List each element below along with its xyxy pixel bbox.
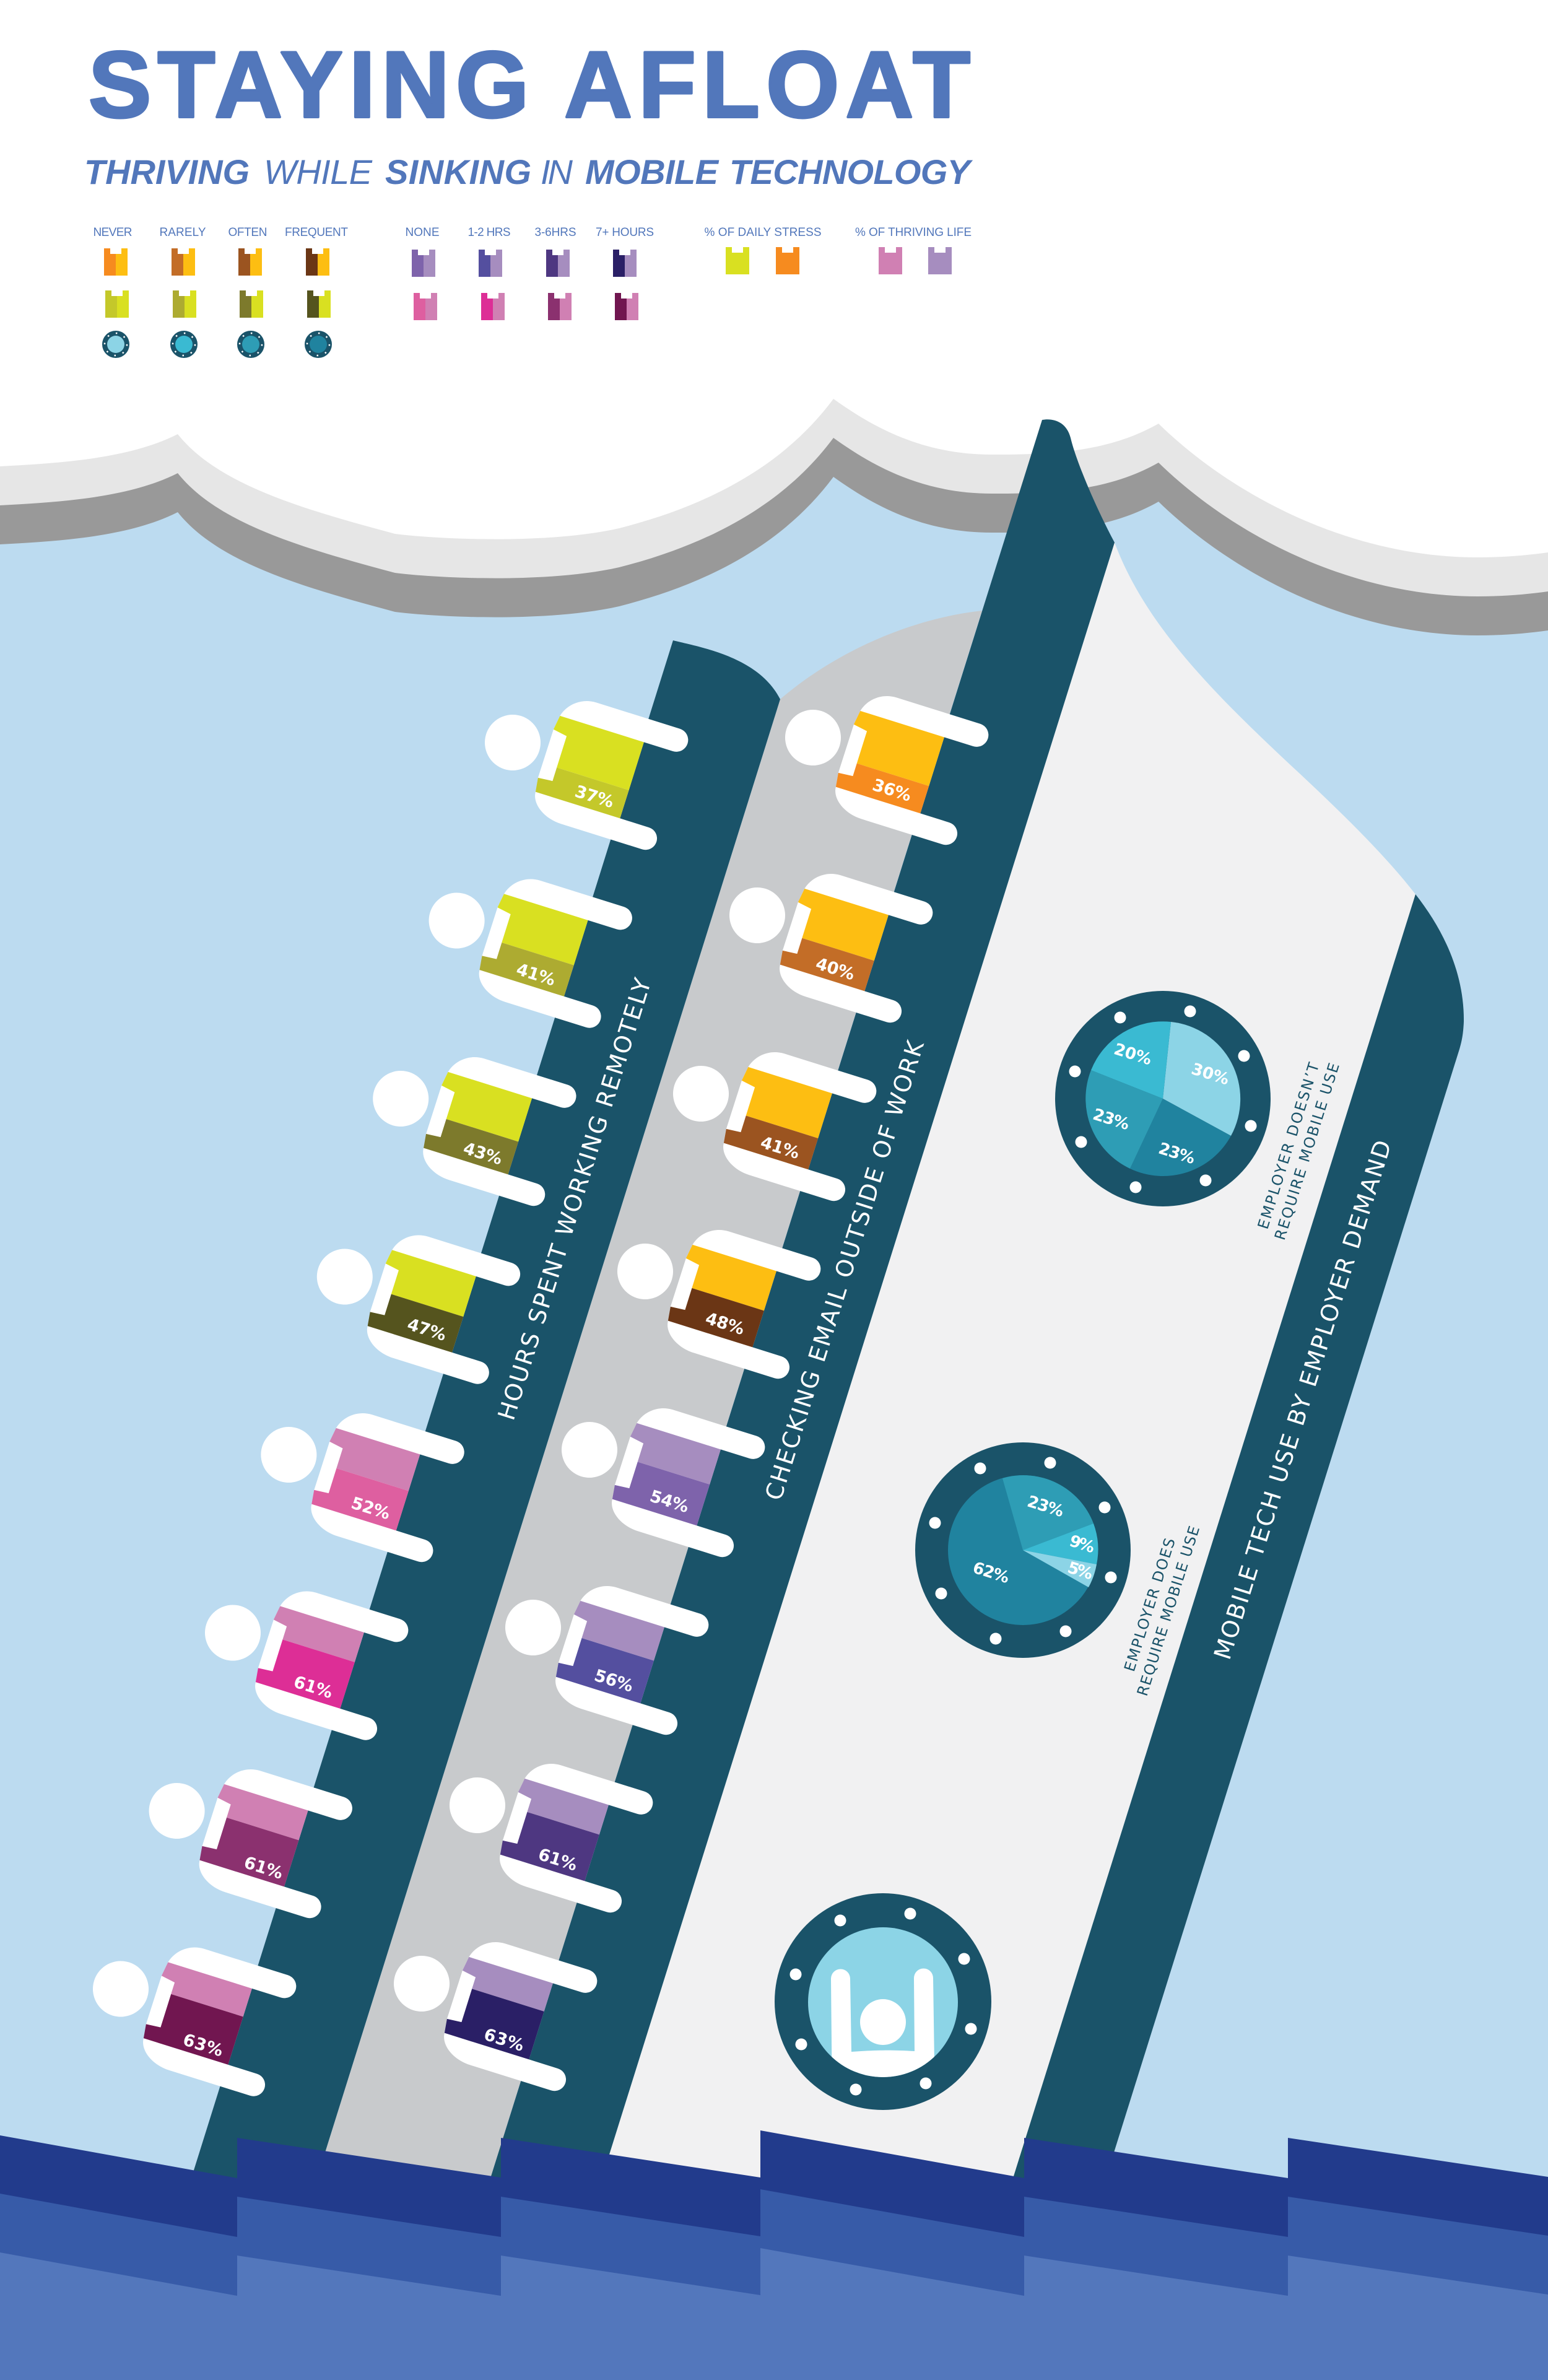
porthole pie: employer does require: 62% — [970, 1559, 1012, 1587]
person 43%: 43% — [461, 1139, 505, 1169]
legend labels: 3-6HRS — [535, 226, 576, 239]
legend labels — [93, 226, 972, 239]
legend: hours purple shirts — [412, 250, 637, 277]
hull strip: outer left — [175, 640, 780, 2230]
person 47% — [299, 1208, 523, 1387]
legend: stress shirts — [726, 247, 799, 274]
person 52%: 52% — [349, 1494, 393, 1523]
person 43% — [355, 1030, 579, 1209]
subtitle: IN — [541, 152, 573, 191]
legend labels: % OF THRIVING LIFE — [855, 226, 972, 239]
person 41%: 41% — [758, 1133, 802, 1163]
legend: thriving shirts — [879, 247, 952, 274]
person 61% — [432, 1737, 656, 1916]
person 52% — [243, 1386, 467, 1565]
porthole pie: employer does require — [915, 1442, 1131, 1658]
person 41% — [411, 852, 635, 1031]
strip label: hours: HOURS SPENT WORKING REMOTELY — [493, 975, 657, 1423]
person 41%: 41% — [514, 960, 557, 990]
person 48% — [600, 1203, 824, 1382]
ship deck — [586, 543, 1415, 2230]
strip label: employer demand: MOBILE TECH USE BY EMPLOYER DEMAND — [1209, 1137, 1397, 1663]
porthole pie: employer does require: 9% — [1067, 1532, 1097, 1557]
people: right column checking email — [376, 669, 991, 2094]
legend: hours pink shirts — [414, 293, 638, 320]
strip label: email: CHECKING EMAIL OUTSIDE OF WORK — [760, 1037, 929, 1504]
porthole pie: employer does require: 5% — [1065, 1558, 1095, 1584]
legend labels: RARELY — [160, 226, 206, 239]
person 36%: 36% — [870, 775, 913, 806]
caption: employer doesn't require: EMPLOYER DOESN’T — [1254, 1060, 1323, 1231]
ocean waves — [0, 2130, 1548, 2380]
person 63% — [76, 1920, 299, 2099]
subtitle: THRIVING — [84, 152, 250, 191]
person 63%: 63% — [181, 2030, 225, 2061]
person 61% pink: 61% — [291, 1672, 335, 1702]
subtitle: WHILE — [264, 152, 373, 191]
legend labels: NEVER — [93, 226, 133, 239]
person 61%: 61% — [536, 1845, 580, 1875]
subtitle: TECHNOLOGY — [729, 152, 973, 191]
porthole pie: employer does require: 23% — [1025, 1493, 1066, 1521]
person 61% pink — [188, 1564, 411, 1743]
legend labels: OFTEN — [228, 226, 267, 239]
legend: remote hours lime shirts — [105, 290, 331, 318]
person 61% plum: 61% — [241, 1853, 285, 1883]
person 37%: 37% — [573, 782, 616, 812]
person 37% — [467, 674, 691, 853]
caption: employer does require: EMPLOYER DOES — [1121, 1536, 1179, 1673]
hull strip: middle with bow — [474, 419, 1115, 2230]
person 63% — [376, 1915, 600, 2094]
legend labels: % OF DAILY STRESS — [705, 226, 821, 239]
caption: employer does require: REQUIRE MOBILE USE — [1134, 1524, 1203, 1698]
porthole pie: employer doesn't require: 30% — [1189, 1060, 1231, 1089]
person 48%: 48% — [703, 1309, 747, 1339]
subtitle — [84, 152, 973, 191]
person 56%: 56% — [592, 1666, 635, 1696]
title: STAYING AFLOAT — [89, 32, 970, 137]
person 40% — [712, 847, 936, 1026]
legend: porthole colour keys — [102, 331, 332, 358]
person 41% — [656, 1025, 879, 1204]
caption: employer doesn't require: REQUIRE MOBILE USE — [1271, 1061, 1343, 1242]
porthole with person — [775, 1893, 991, 2110]
person 54% — [544, 1381, 768, 1560]
legend labels: NONE — [405, 226, 440, 239]
legend labels: 7+ HOURS — [596, 226, 654, 239]
subtitle: MOBILE — [585, 152, 720, 191]
wave-shaped header band — [0, 0, 1548, 635]
porthole pie: employer doesn't require: 23% — [1156, 1140, 1198, 1168]
person 40%: 40% — [814, 954, 857, 984]
legend labels: FREQUENT — [285, 226, 348, 239]
person 63%: 63% — [482, 2025, 526, 2055]
porthole pie: employer doesn't require — [1055, 991, 1271, 1206]
hull strip: right — [997, 894, 1464, 2230]
people: left column remote hours — [76, 674, 691, 2099]
ship walkway — [301, 611, 982, 2230]
subtitle: SINKING — [385, 152, 531, 191]
legend: email frequency shirts — [104, 248, 329, 276]
legend labels: 1-2 HRS — [468, 226, 510, 239]
legend — [93, 226, 972, 358]
person 47%: 47% — [405, 1315, 448, 1345]
person 56% — [488, 1559, 711, 1738]
person 61% plum — [131, 1742, 355, 1921]
sinking ship — [175, 419, 1464, 2230]
person 36% — [768, 669, 991, 848]
porthole pie: employer doesn't require: 23% — [1090, 1105, 1132, 1134]
porthole pie: employer doesn't require: 20% — [1111, 1040, 1154, 1069]
person 54%: 54% — [648, 1486, 691, 1517]
